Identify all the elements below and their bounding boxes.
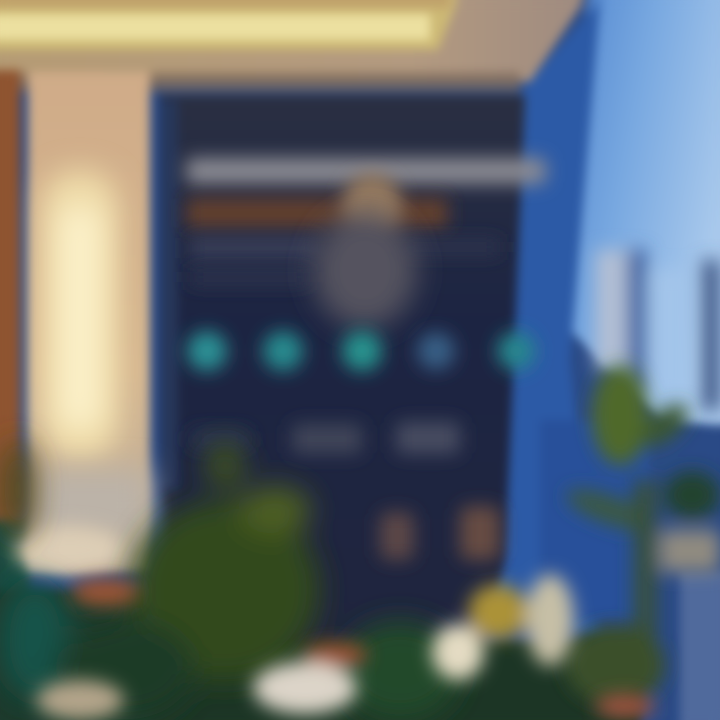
teal icons [187, 331, 227, 371]
lower text blocks [292, 424, 362, 454]
bottom warm accents [380, 512, 414, 560]
building silhouettes in the window [596, 250, 720, 410]
display wall [160, 95, 525, 660]
text lines [190, 238, 320, 258]
illuminated column glow [15, 170, 150, 574]
lower foliage mass [0, 590, 150, 720]
foreground greenery [0, 440, 460, 720]
central figure [342, 173, 402, 237]
flowers [36, 574, 655, 720]
ceiling [0, 0, 585, 82]
panel: display content [186, 158, 546, 560]
ceiling light cove [0, 0, 458, 50]
heading bar [186, 158, 546, 184]
column [28, 72, 150, 572]
subheading bar [186, 198, 448, 228]
wood wall [0, 70, 20, 520]
right plant [562, 365, 720, 705]
